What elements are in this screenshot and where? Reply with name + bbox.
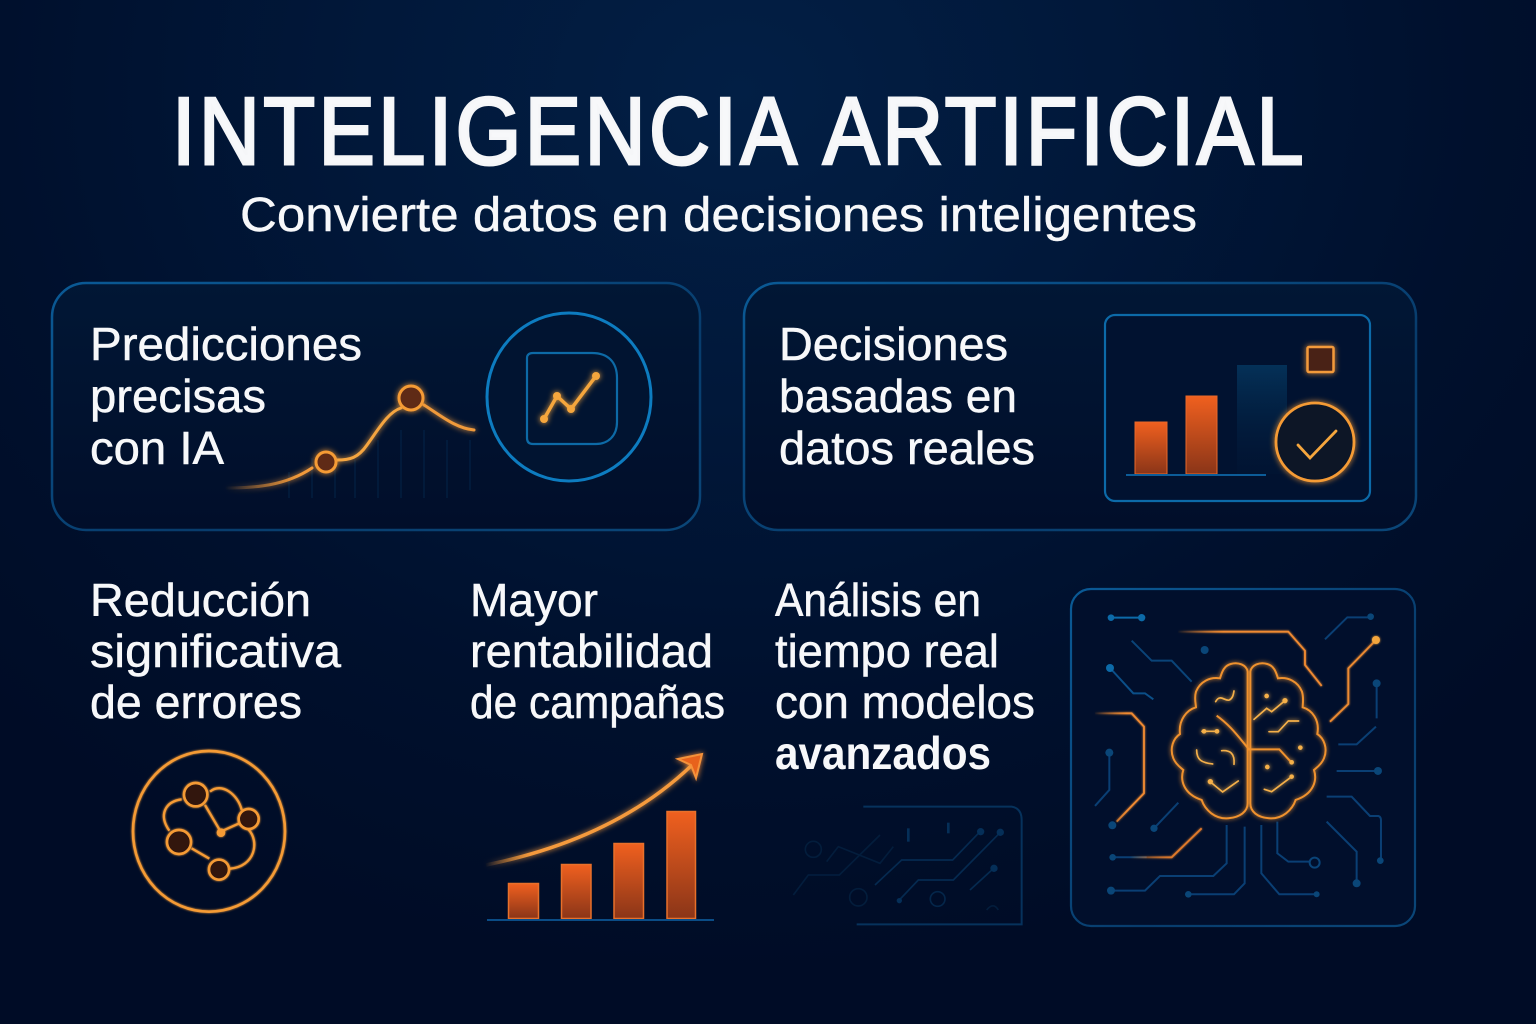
blue nodes: [1105, 613, 1384, 898]
text: analisis en tiempo real: con modelos: [775, 676, 1035, 728]
text: analisis en tiempo real: tiempo real: [775, 625, 999, 677]
icon: network in circle: [133, 751, 285, 912]
title: INTELIGENCIA: [172, 78, 797, 185]
text: reduccion de errores: significativa: [90, 625, 341, 677]
text: mayor rentabilidad: rentabilidad: [470, 625, 713, 677]
text: decisiones basadas en datos reales: datos reales: [779, 422, 1035, 474]
orange traces: [1095, 632, 1380, 857]
text: decisiones basadas en datos reales: Decisiones: [779, 318, 1008, 370]
title: [172, 78, 1303, 185]
text: mayor rentabilidad: de campañas: [470, 676, 725, 728]
text: decisiones basadas en datos reales: [779, 318, 1035, 474]
text: analisis en tiempo real: Análisis en: [775, 574, 981, 626]
blue circuit traces: [1095, 617, 1381, 894]
panel: faint circuit: [793, 807, 1022, 924]
chart: rising bars with arrow: [486, 754, 714, 920]
icon: bar chart with check: [1105, 315, 1370, 501]
text: reduccion de errores: [90, 574, 341, 728]
text: predicciones precisas con IA: con IA: [90, 422, 224, 474]
text: mayor rentabilidad: Mayor: [470, 574, 598, 626]
panel: decisiones: [744, 283, 1416, 530]
text: reduccion de errores: de errores: [90, 676, 302, 728]
text: reduccion de errores: Reducción: [90, 574, 311, 626]
text: predicciones precisas con IA: Predicciones: [90, 318, 362, 370]
panel: predicciones: [52, 283, 700, 530]
text: predicciones precisas con IA: [90, 318, 362, 474]
brain: [1172, 663, 1326, 818]
subtitle: Convierte datos en decisiones inteligentes: [240, 189, 1197, 242]
text: decisiones basadas en datos reales: basadas en: [779, 370, 1017, 422]
panel: brain circuit: [1071, 589, 1415, 926]
text: analisis en tiempo real: [775, 574, 1035, 779]
text: mayor rentabilidad: [470, 574, 725, 728]
text: predicciones precisas con IA: precisas: [90, 370, 266, 422]
icon: chart in circle: [487, 313, 651, 481]
chart: line curve with nodes: [225, 386, 474, 498]
title: ARTIFICIAL: [823, 78, 1303, 185]
text: analisis en tiempo real: avanzados: [775, 727, 991, 779]
